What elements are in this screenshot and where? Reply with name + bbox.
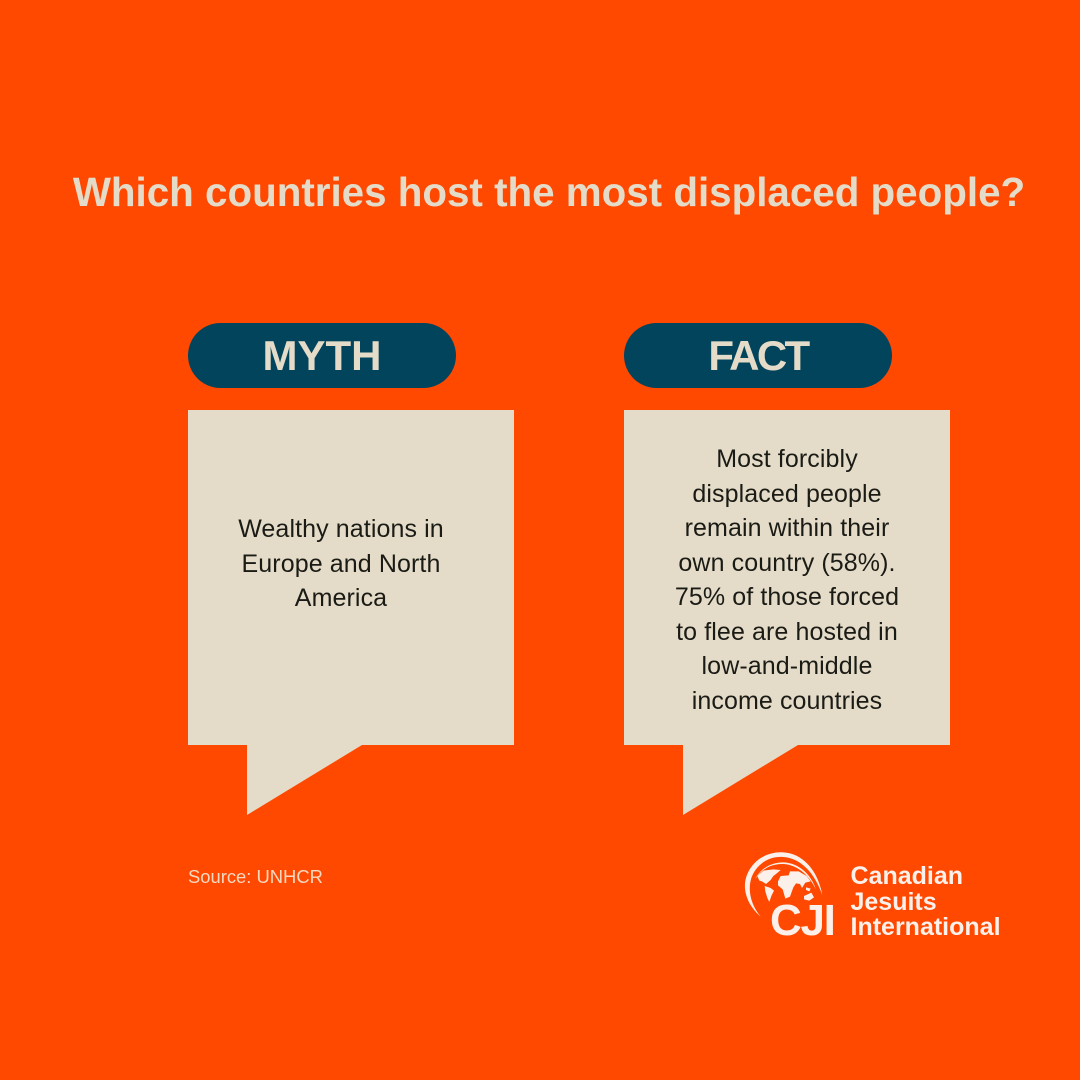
logo wordmark: Canadian bbox=[850, 862, 963, 890]
myth text: America bbox=[295, 584, 387, 612]
fact label pill: FACT bbox=[708, 332, 808, 379]
fact text: 75% of those forced bbox=[675, 583, 899, 611]
title: Which countries host the most displaced people? bbox=[73, 169, 1025, 215]
myth label pill: MYTH bbox=[262, 332, 382, 379]
logo: Canadian Jesuits International bbox=[744, 852, 1001, 945]
icon: globe with arcs bbox=[744, 852, 822, 916]
myth text: Europe and North bbox=[242, 550, 440, 578]
fact text: income countries bbox=[692, 686, 882, 714]
fact text: Most forcibly bbox=[716, 445, 858, 473]
fact text: to flee are hosted in bbox=[676, 618, 898, 646]
myth speech bubble bbox=[188, 410, 514, 815]
logo initials: CJI bbox=[770, 896, 835, 945]
fact label pill bbox=[624, 323, 892, 388]
source note: Source: UNHCR bbox=[188, 866, 323, 887]
logo wordmark bbox=[850, 862, 1001, 941]
fact text: displaced people bbox=[692, 480, 882, 508]
fact text: remain within their bbox=[685, 514, 889, 542]
fact speech bubble bbox=[624, 410, 950, 815]
myth label pill bbox=[188, 323, 456, 388]
fact text: own country (58%). bbox=[678, 548, 896, 576]
myth text: Wealthy nations in bbox=[238, 515, 444, 543]
fact text: low-and-middle bbox=[702, 652, 872, 680]
fact text bbox=[675, 445, 899, 714]
logo wordmark: Jesuits bbox=[850, 888, 937, 916]
myth text bbox=[238, 515, 444, 612]
logo wordmark: International bbox=[850, 913, 1001, 941]
